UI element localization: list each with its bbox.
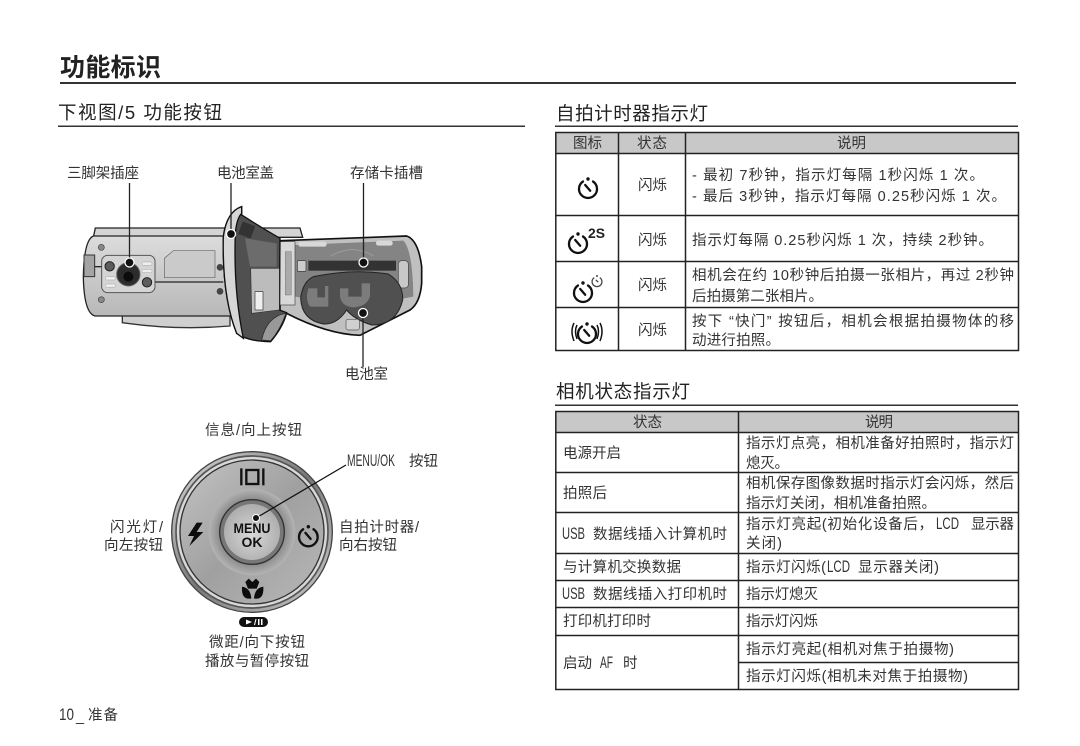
dial labels: 微距/向下按钮 [209, 634, 305, 651]
page number: _ [75, 709, 85, 725]
callout line [252, 465, 346, 522]
dial labels [104, 422, 438, 670]
row: double self-timer: 相机会在约 10秒钟后拍摄一张相片，再过 2秒钟 [692, 267, 1014, 284]
description column: 显示器关闭) [858, 559, 939, 576]
status column: 时 [623, 655, 638, 672]
play pause pill [239, 617, 268, 627]
status column: 电源开启 [563, 445, 621, 462]
description column: 指示灯关闭，相机准备拍照。 [746, 495, 936, 512]
description column: 指示灯熄灭 [746, 586, 818, 603]
icon: flash [188, 523, 203, 546]
row: self-timer 10s: - 最后 3秒钟，指示灯每隔 0.25秒闪烁 1 次。 [692, 188, 1006, 205]
header row: 说明 [837, 135, 866, 152]
page number [59, 706, 118, 725]
status column: 启动 [563, 655, 592, 672]
description column [746, 435, 1014, 685]
icon: info [241, 468, 263, 485]
description column: 指示灯点亮，相机准备好拍照时，指示灯 [746, 435, 1014, 452]
status column: 与计算机交换数据 [563, 558, 681, 576]
table: self-timer lamp [556, 132, 1018, 350]
page number: 10 [59, 706, 74, 724]
description column: 指示灯亮起(相机对焦于拍摄物) [746, 641, 954, 658]
row: motion self-timer: 闪烁 [638, 322, 667, 339]
callout dots [125, 230, 368, 318]
grid [556, 132, 1018, 350]
description column: LCD [827, 558, 850, 576]
status column: USB [562, 585, 585, 603]
header row: 状态 [633, 414, 662, 431]
dial labels: 按钮 [409, 453, 438, 470]
row: self-timer 2s: 2S [588, 226, 605, 241]
dial labels: 闪光灯/ [110, 519, 164, 536]
status column: 数据线插入打印机时 [593, 586, 727, 603]
callout labels: 存储卡插槽 [350, 165, 423, 182]
status column: 数据线插入计算机时 [593, 526, 727, 543]
status column: 打印机打印时 [563, 613, 651, 630]
status column: USB [562, 525, 585, 543]
row: double self-timer: 闪烁 [638, 277, 667, 294]
description column: 熄灭。 [746, 455, 789, 472]
control dial diagram [104, 422, 438, 670]
description column: 指示灯闪烁 [746, 613, 818, 630]
callout labels: 三脚架插座 [67, 165, 139, 182]
dial labels: MENU/OK [347, 452, 395, 470]
dial labels: 信息/向上按钮 [205, 422, 302, 439]
page number: 准备 [88, 707, 118, 724]
camera bottom-view diagram [67, 165, 423, 383]
description column: 指示灯闪烁( [746, 559, 826, 576]
row: self-timer 10s: - 最初 7秒钟，指示灯每隔 1秒闪烁 1 次。 [692, 167, 984, 184]
title: 功能标识 [60, 54, 161, 82]
title rule [60, 82, 1016, 84]
status column: AF [600, 654, 613, 672]
grid [556, 412, 1018, 690]
header row: 说明 [865, 414, 893, 431]
icon: macro [242, 579, 263, 599]
status column [562, 445, 727, 672]
description column: 相机保存图像数据时指示灯会闪烁，然后 [746, 475, 1014, 492]
description column: 指示灯亮起(初始化设备后， [746, 516, 933, 533]
dial [172, 452, 332, 612]
table: camera status lamp [556, 412, 1018, 690]
heading: self-timer lamp: 自拍计时器指示灯 [556, 103, 708, 124]
heading: camera status lamp: 相机状态指示灯 [556, 381, 690, 402]
description column: 显示器 [971, 517, 1014, 533]
row: self-timer 2s: 指示灯每隔 0.25秒闪烁 1 次，持续 2秒钟。 [692, 232, 993, 249]
row: self-timer 10s [579, 167, 1006, 205]
callout labels [67, 165, 423, 383]
header row [556, 412, 1018, 432]
row: motion self-timer: 动进行拍照。 [692, 332, 780, 349]
center button label: MENU [234, 520, 270, 536]
callout labels: 电池室 [345, 366, 388, 383]
dial labels: 自拍计时器/ [339, 519, 420, 536]
dial labels: 向左按钮 [104, 537, 163, 554]
row: double self-timer: 后拍摄第二张相片。 [692, 287, 823, 305]
header row: 状态 [637, 135, 667, 152]
row: double self-timer [574, 267, 1014, 305]
description column: 关闭) [746, 535, 782, 552]
dial labels: 播放与暂停按钮 [205, 653, 309, 670]
center button label [234, 520, 270, 550]
row: self-timer 2s: 闪烁 [638, 232, 667, 249]
row: self-timer 2s [569, 226, 993, 253]
icon: self-timer [299, 525, 318, 546]
heading: bottom view: 下视图/5 功能按钮 [58, 102, 222, 123]
row: self-timer 10s: 闪烁 [638, 177, 667, 194]
dial labels: 向右按钮 [339, 537, 397, 554]
status column: 拍照后 [563, 485, 607, 502]
row: motion self-timer: 按下 “快门” 按钮后，相机会根据拍摄物体的移 [692, 313, 1014, 330]
row: motion self-timer [572, 313, 1014, 349]
description column: LCD [936, 515, 959, 533]
header row [556, 133, 1018, 153]
camera illustration [83, 207, 422, 342]
header row: 图标 [573, 135, 602, 152]
center button label: OK [242, 534, 262, 550]
callout lines [130, 183, 364, 367]
description column: 指示灯闪烁(相机未对焦于拍摄物) [746, 668, 968, 685]
callout labels: 电池室盖 [217, 165, 274, 182]
